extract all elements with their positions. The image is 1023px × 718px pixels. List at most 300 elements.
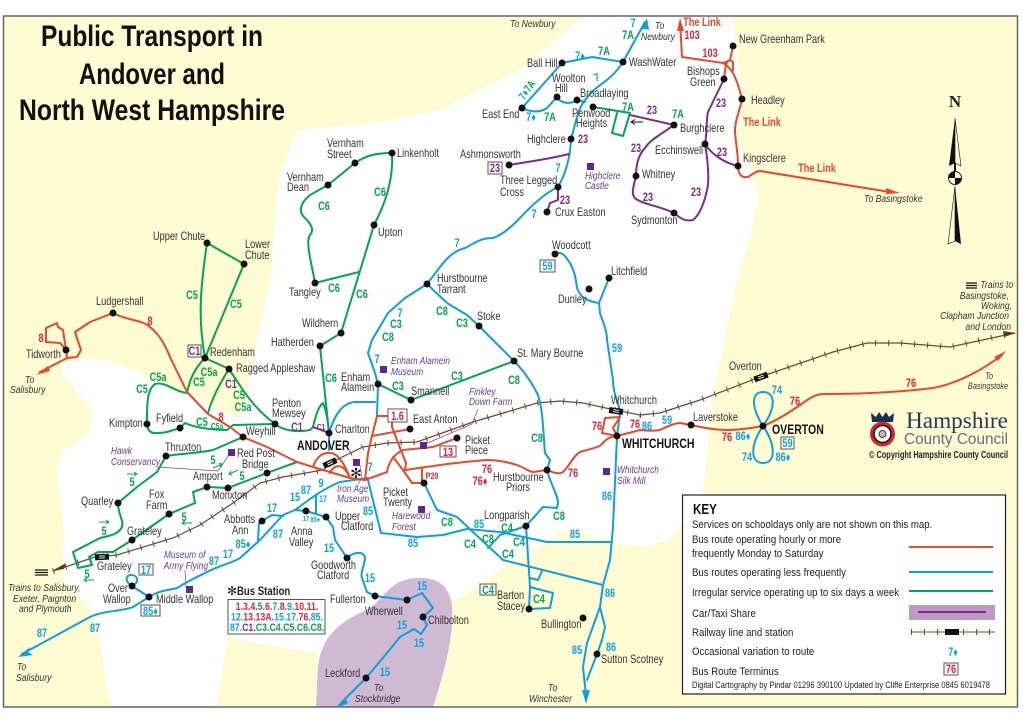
railway stations: [95, 372, 769, 560]
route labels: cyan: 15: [417, 581, 427, 593]
route labels: green: 5: [210, 455, 216, 467]
direction labels: Newbury: [641, 31, 676, 43]
icon: black arrow: [631, 120, 643, 124]
icon: bus station asterisk at Andover: ✻: [350, 466, 362, 482]
place names: Clatford: [317, 570, 349, 582]
route labels: green: C5a: [211, 421, 224, 431]
place names: Quarley: [81, 496, 114, 508]
title: Public Transport in: [41, 20, 263, 53]
place names: Grateley: [127, 526, 162, 538]
place names: [26, 34, 826, 680]
place names: Bishops: [687, 66, 720, 78]
route labels: green: C5: [196, 417, 208, 429]
route labels: green: C4: [501, 523, 513, 535]
direction labels: To: [25, 374, 35, 386]
place names: Grateley: [97, 561, 132, 573]
route labels: cyan: 7♦7A: [517, 78, 539, 102]
route labels: green: C3: [392, 381, 404, 393]
route labels: red and purple: 8: [147, 316, 153, 328]
points of interest names: Forest: [392, 521, 416, 533]
points of interest names: Army Flying: [163, 560, 209, 572]
direction labels: To: [985, 371, 993, 381]
title: North West Hampshire: [19, 94, 285, 127]
direction labels: and Plymouth: [19, 603, 72, 615]
direction labels: To: [17, 661, 27, 673]
route labels: green: C8: [436, 306, 448, 318]
route terminus boxes: 17: [141, 565, 151, 577]
place names: Kimpton: [109, 418, 143, 430]
place names: Burghclere: [680, 123, 725, 135]
route terminus boxes: 1.6: [391, 411, 404, 423]
place names: Green: [690, 77, 716, 89]
route labels: cyan: 7: [531, 209, 537, 221]
place names: Vernham: [327, 138, 364, 150]
direction labels: To: [548, 682, 558, 694]
place names: Mewsey: [272, 408, 306, 420]
route labels: green: C3: [390, 319, 402, 331]
key panel: Car/Taxi Share: [692, 607, 756, 620]
place names: Monxton: [212, 490, 247, 502]
route labels: green: C6: [374, 187, 386, 199]
route labels: red and purple: The Link: [743, 117, 781, 129]
place names: Litchfield: [611, 266, 647, 278]
bus station list: Bus Station: [237, 585, 290, 598]
place names: Stoke: [477, 311, 501, 323]
route labels: red and purple: 76: [630, 419, 640, 431]
route labels: cyan: 87: [37, 628, 47, 640]
bus stops: [62, 42, 766, 682]
route labels: green: C5: [193, 377, 205, 389]
route terminus boxes: 13: [443, 447, 453, 459]
bus station list: 12.13.13A.15.17.76.85.: [231, 612, 323, 624]
route labels: green: 5: [101, 526, 107, 538]
place names: Piece: [465, 445, 488, 457]
place names: Barton: [497, 590, 524, 602]
direction labels: Basingstoke,: [960, 290, 1009, 302]
bus station list: 87.C1.C3.C4.C5.C6.C8.: [230, 622, 324, 634]
route labels: red and purple: 23: [647, 105, 657, 117]
route labels: green: 5: [239, 471, 245, 483]
place names: Bridge: [242, 459, 269, 471]
points of interest names: Down Farm: [469, 396, 512, 408]
route labels: cyan: 15: [414, 638, 424, 650]
place names: Ann: [232, 525, 249, 537]
place names: East Anton: [413, 414, 458, 426]
route labels: green: C8: [553, 511, 565, 523]
direction labels: Basingstoke: [968, 381, 1008, 391]
route labels: cyan: 86: [606, 642, 616, 654]
place names: Abbotts: [224, 514, 255, 526]
route terminus boxes: [139, 162, 794, 618]
route labels: cyan: 86: [605, 588, 615, 600]
route labels: cyan: 87: [90, 623, 100, 635]
place names: Hill: [555, 83, 568, 95]
place names: Woolton: [552, 73, 586, 85]
north arrow: N: [949, 92, 962, 111]
place names: Chute: [245, 250, 270, 262]
route labels: green: C6: [328, 283, 340, 295]
route labels: green: C4: [533, 594, 545, 606]
route labels: green: 5: [129, 477, 135, 489]
route labels: cyan: 7: [397, 308, 403, 320]
place names: Wherwell: [365, 606, 403, 618]
map background: white district area: [57, 16, 758, 707]
route labels: cyan: 87: [209, 556, 219, 568]
route labels: cyan: 7: [454, 238, 460, 250]
place names: Upper Chute: [153, 231, 205, 243]
route labels: green: 7A: [544, 112, 556, 124]
small green direction arrows: [84, 463, 238, 582]
town names: WHITCHURCH: [622, 436, 694, 451]
route labels: red and purple: C1: [317, 422, 326, 432]
place names: East End: [482, 109, 519, 121]
route terminus boxes: 23: [490, 163, 500, 175]
key panel: [682, 495, 1006, 694]
route labels: green: C6: [356, 289, 368, 301]
routes: green irregular services: [73, 107, 630, 568]
route labels: red and purple: 76: [482, 464, 492, 476]
place names: Hurstbourne: [437, 273, 488, 285]
points of interest names: Museum: [337, 493, 369, 505]
point of interest leader lines: [157, 409, 478, 587]
place names: Ludgershall: [96, 296, 144, 308]
points of interest names: Silk Mill: [617, 475, 646, 487]
route labels: cyan: 85: [570, 529, 580, 541]
place names: Ashmonsworth: [460, 149, 521, 161]
route labels: cyan: 7: [367, 462, 373, 474]
route labels: green: C8: [482, 534, 494, 546]
place names: Whitchurch: [611, 395, 657, 407]
route labels: green: C5a: [201, 367, 218, 379]
place names: Woodcott: [552, 240, 591, 252]
direction labels: Trains to: [980, 279, 1014, 291]
points of interest names: Hawk: [111, 445, 133, 457]
place names: Picket: [465, 435, 490, 447]
place names: Middle Wallop: [156, 594, 214, 606]
place names: Fox: [149, 489, 165, 501]
place names: Dunley: [558, 294, 587, 306]
route labels: cyan: 85♦: [236, 539, 250, 551]
route labels: cyan: 74: [742, 452, 752, 464]
route terminus boxes: 59: [542, 261, 553, 273]
place names: Priors: [506, 482, 530, 494]
Hampshire County Council logo: [869, 408, 1008, 461]
place names: Highclere: [527, 134, 566, 146]
route labels: red and purple: 76♦: [473, 476, 487, 488]
route labels: green: C5: [136, 384, 148, 396]
town names: [297, 422, 824, 453]
key panel: Bus routes operating less frequently: [692, 566, 847, 579]
place names: Valley: [289, 537, 314, 549]
route labels: cyan: 74: [772, 385, 782, 397]
route labels: green: C5: [230, 299, 242, 311]
route labels: cyan: 85: [408, 538, 418, 550]
route labels: red and purple: 23: [631, 143, 641, 155]
direction labels: Salisbury: [10, 384, 46, 396]
route labels: cyan: 85: [474, 519, 484, 531]
bus station list: 1.3.4.5.6.7.8.9.10.11.: [236, 601, 319, 613]
route labels: red and purple: P20: [426, 471, 439, 481]
bus station list: [227, 584, 325, 634]
place names: Leckford: [325, 668, 360, 680]
route labels: red and purple: C1: [225, 379, 237, 391]
place names: Penton: [272, 398, 301, 410]
direction labels: and London: [966, 321, 1011, 333]
direction labels: To Newbury: [510, 18, 557, 30]
place names: Linkenholt: [397, 148, 439, 160]
route labels: green: C4: [464, 539, 476, 551]
direction labels: To: [655, 20, 665, 32]
route labels: cyan: 85: [363, 506, 373, 518]
route labels: green: C8: [382, 332, 394, 344]
place names: Weyhill: [246, 426, 275, 438]
key panel: Bus Route Terminus: [692, 665, 779, 678]
route labels: cyan: 85♦: [310, 516, 320, 524]
routes: cyan less frequent services: [18, 18, 773, 706]
place names: Wildhern: [302, 318, 338, 330]
route labels: red and purple: 103: [684, 30, 700, 42]
route labels: green: 7A: [622, 102, 634, 114]
key panel: 76: [946, 664, 956, 676]
place names: Tarrant: [437, 284, 466, 296]
place names: Tangley: [289, 287, 321, 299]
route labels: red and purple: 76: [568, 468, 578, 480]
key panel: Services on schooldays only are not shown on this map.: [692, 518, 932, 531]
points of interest names: Harewood: [392, 510, 431, 522]
route labels: red and purple: 76: [722, 432, 732, 444]
route labels: cyan: 86♦: [736, 431, 750, 443]
route labels: green: C5: [186, 290, 198, 302]
route labels: cyan: 17: [303, 515, 310, 523]
route labels: cyan: 17: [267, 503, 277, 515]
key panel: Railway line and station: [692, 626, 793, 639]
key panel: Bus route operating hourly or more: [692, 533, 841, 546]
title: Andover and: [79, 58, 225, 91]
place names: Fyfield: [156, 413, 183, 425]
route labels: red and purple: 103: [702, 48, 718, 60]
route labels: cyan: 7♦: [575, 51, 585, 63]
place names: Whitney: [642, 169, 676, 181]
route labels: green: C3: [456, 318, 468, 330]
place names: Alamein: [341, 382, 374, 394]
route labels: cyan: 7: [630, 18, 636, 30]
place names: Ball Hill: [527, 58, 558, 70]
route labels: red and purple: 23: [717, 147, 727, 159]
route labels: green: C6: [325, 373, 337, 385]
place names: Picket: [383, 487, 408, 499]
route labels: cyan: 87: [301, 485, 311, 497]
place names: Chilbolton: [428, 615, 469, 627]
place names: Redenham: [210, 347, 255, 359]
route terminus boxes: 85♦: [143, 606, 158, 618]
place names: Ragged Appleshaw: [236, 363, 316, 375]
direction labels: To: [374, 682, 384, 694]
place names: Tidworth: [26, 349, 61, 361]
place names: Penwood: [572, 108, 611, 120]
route labels: cyan: 86: [602, 491, 612, 503]
place names: Laverstoke: [693, 412, 738, 424]
Hampshire County Council logo: Hampshire: [906, 408, 1008, 433]
route labels: red and purple: 76: [906, 378, 916, 390]
points of interest names: Castle: [585, 180, 609, 192]
route labels: red and purple: [38, 17, 916, 488]
place names: Dean: [287, 182, 309, 194]
points of interest names: Conservancy: [111, 456, 161, 468]
route labels: cyan: 7: [593, 72, 602, 85]
place names: Bullington: [541, 619, 582, 631]
route labels: cyan: 17: [223, 549, 233, 561]
route labels: red and purple: 23: [560, 195, 570, 207]
route labels: cyan: 15: [290, 492, 300, 504]
route labels: cyan: 86♦: [776, 452, 790, 464]
route labels: green: [84, 30, 684, 606]
route labels: cyan: 87: [273, 529, 283, 541]
place names: Hatherden: [271, 337, 314, 349]
route labels: red and purple: 76: [790, 396, 800, 408]
place names: Hurstbourne: [493, 472, 544, 484]
place names: Thruxton: [165, 442, 201, 454]
route labels: cyan: 15: [397, 620, 407, 632]
points of interest squares: [186, 163, 610, 593]
place names: Upton: [378, 227, 403, 239]
route labels: cyan: 7: [374, 354, 380, 366]
north arrow: [948, 92, 962, 244]
route labels: cyan: 15: [380, 667, 390, 679]
route labels: red and purple: 8: [218, 412, 224, 424]
route labels: cyan: [37, 18, 790, 679]
place names: Clatford: [341, 521, 373, 533]
routes: red hourly services: [36, 18, 1006, 483]
place names: Farm: [146, 500, 167, 512]
route terminus boxes: C4: [482, 585, 494, 597]
title: [19, 20, 285, 127]
route labels: green: C3: [451, 371, 463, 383]
route labels: green: 5: [84, 569, 90, 581]
town names: OVERTON: [772, 422, 824, 437]
points of interest names: Museum: [391, 366, 423, 378]
direction labels: To Basingstoke: [864, 193, 923, 205]
place names: Street: [327, 149, 352, 161]
car/taxi share area: [316, 578, 452, 707]
route labels: cyan: 86: [642, 421, 652, 433]
place names: Ecchinswell: [655, 145, 703, 157]
place names: New Greenham Park: [739, 34, 826, 46]
route labels: green: C5a: [150, 372, 167, 384]
place names: Red Post: [237, 448, 275, 460]
place names: Cross: [500, 187, 524, 199]
route labels: green: C5a: [235, 402, 252, 414]
key panel: frequently Monday to Saturday: [692, 547, 824, 560]
place names: Fullerton: [330, 594, 366, 606]
points of interest names: Highclere: [585, 170, 620, 182]
direction labels: Salisbury: [16, 672, 52, 684]
place names: Enham: [341, 372, 370, 384]
bus station list: ✻: [227, 584, 237, 598]
place names: Anna: [291, 526, 313, 538]
route labels: cyan: 7♦: [526, 112, 536, 124]
direction labels: Stockbridge: [355, 693, 400, 705]
route labels: green: 7A: [622, 30, 634, 42]
route labels: green: C6: [318, 201, 330, 213]
town names: ANDOVER: [297, 438, 350, 453]
place names: Heights: [576, 118, 607, 130]
route labels: green: 7A: [598, 46, 610, 58]
key panel: Occasional variation to route: [692, 645, 814, 658]
place names: Sutton Scotney: [601, 654, 664, 666]
place names: Over: [108, 583, 128, 595]
place names: Charlton: [335, 424, 370, 436]
routes: purple car/taxi share and C1: [313, 79, 738, 433]
route labels: green: C8: [441, 517, 453, 529]
place names: Goodworth: [311, 560, 356, 572]
route labels: cyan: 15: [324, 543, 334, 555]
route labels: red and purple: 23: [643, 192, 653, 204]
route labels: green: 7A: [672, 109, 684, 121]
place names: Smannell: [411, 386, 449, 398]
route labels: red and purple: 23: [716, 98, 726, 110]
direction labels: Clapham Junction: [940, 310, 1009, 322]
route labels: green: C4: [502, 549, 514, 561]
place names: Three Legged: [500, 175, 557, 187]
route labels: red and purple: 23: [578, 134, 588, 146]
route labels: cyan: 7: [555, 163, 561, 175]
icon: national rail symbols: [35, 283, 977, 575]
place names: Broadlaying: [580, 88, 629, 100]
route labels: red and purple: The Link: [798, 163, 836, 175]
direction labels: Winchester: [529, 693, 573, 705]
points of interest names: Finkley: [469, 386, 497, 398]
route labels: cyan: 59: [612, 343, 622, 355]
place names: Lower: [245, 239, 271, 251]
place names: Wallop: [103, 594, 131, 606]
route labels: cyan: 17: [319, 494, 327, 504]
route labels: cyan: 59: [662, 415, 672, 427]
route terminus boxes: 59: [782, 438, 793, 450]
route labels: cyan: 9: [318, 478, 324, 490]
place names: Overton: [729, 361, 762, 373]
Hampshire County Council logo: County Council: [904, 431, 1008, 448]
route labels: cyan: 85: [572, 645, 582, 657]
route labels: cyan: 15: [365, 573, 375, 585]
place names: St. Mary Bourne: [517, 348, 584, 360]
route labels: red and purple: The Link: [683, 17, 721, 29]
route labels: red and purple: 23: [691, 187, 701, 199]
route labels: red and purple: C1: [291, 422, 303, 434]
points of interest names: Museum of: [164, 549, 207, 561]
place names: Kingsclere: [743, 153, 786, 165]
route labels: green: C4: [513, 537, 525, 549]
route labels: green: C8: [531, 433, 543, 445]
railway line: [52, 331, 1016, 571]
points of interest names: Whitchurch: [617, 464, 659, 476]
place names: Amport: [193, 471, 223, 483]
key heading: KEY: [693, 501, 717, 517]
key panel: Irregular service operating up to six days a week: [692, 586, 900, 599]
place names: Twenty: [383, 497, 413, 509]
place names: Longparish: [484, 510, 530, 522]
key panel: 7♦: [948, 647, 958, 659]
place names: Headley: [751, 95, 785, 107]
route labels: green: C8: [508, 375, 520, 387]
route terminus boxes: C1: [189, 346, 201, 358]
direction labels: Exeter, Paignton: [13, 593, 76, 605]
points of interest names: [111, 170, 659, 572]
place names: Stacey: [497, 601, 526, 613]
route labels: green: C5: [233, 390, 245, 402]
direction labels: Trains to Salisbury,: [8, 582, 80, 594]
points of interest names: Iron Age: [337, 483, 368, 495]
direction labels: Woking,: [981, 300, 1012, 312]
